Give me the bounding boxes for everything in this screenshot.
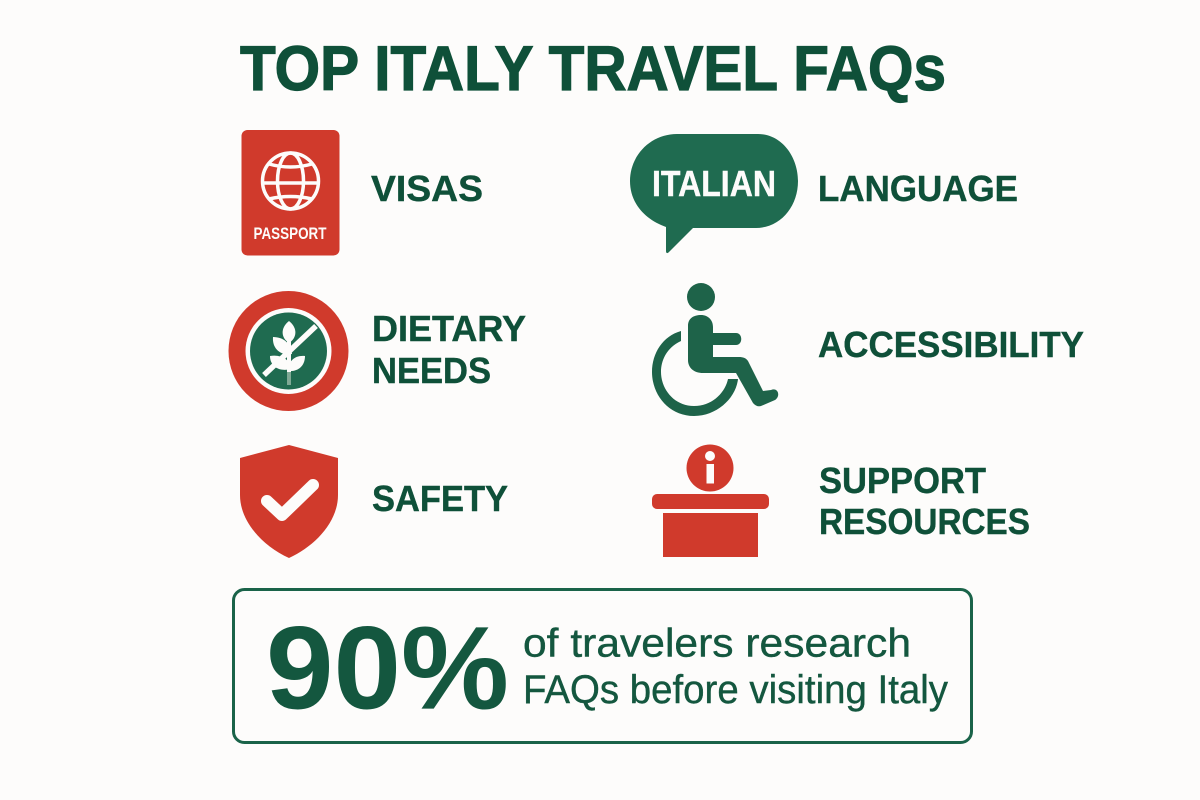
label: support resources <box>819 460 1030 542</box>
icon: information desk <box>652 444 769 557</box>
label: dietary needs <box>372 308 526 391</box>
icon: speech bubble: ITALIAN <box>652 163 776 204</box>
label: support resources: SUPPORT <box>819 460 986 501</box>
label: support resources: RESOURCES <box>819 501 1030 542</box>
label: dietary needs: DIETARY <box>372 308 526 349</box>
label: accessibility: ACCESSIBILITY <box>818 324 1084 365</box>
label: language: LANGUAGE <box>818 168 1018 209</box>
big number: 90% <box>266 602 509 734</box>
icon: passport <box>242 130 340 256</box>
icon: wheelchair <box>652 283 778 416</box>
icon: speech bubble <box>630 134 798 253</box>
icon: shield <box>240 445 338 558</box>
label: dietary needs: NEEDS <box>372 350 491 391</box>
callout text: of travelers research <box>523 622 911 666</box>
callout text: FAQs before visiting Italy <box>523 668 948 712</box>
callout: statistic box <box>234 590 972 742</box>
icon: no wheat <box>228 291 348 411</box>
label: visas: VISAS <box>371 168 483 209</box>
title: TOP ITALY TRAVEL FAQs <box>240 34 946 104</box>
callout text <box>523 622 948 712</box>
icon: passport: PASSPORT <box>254 224 327 243</box>
label: safety: SAFETY <box>372 478 508 519</box>
